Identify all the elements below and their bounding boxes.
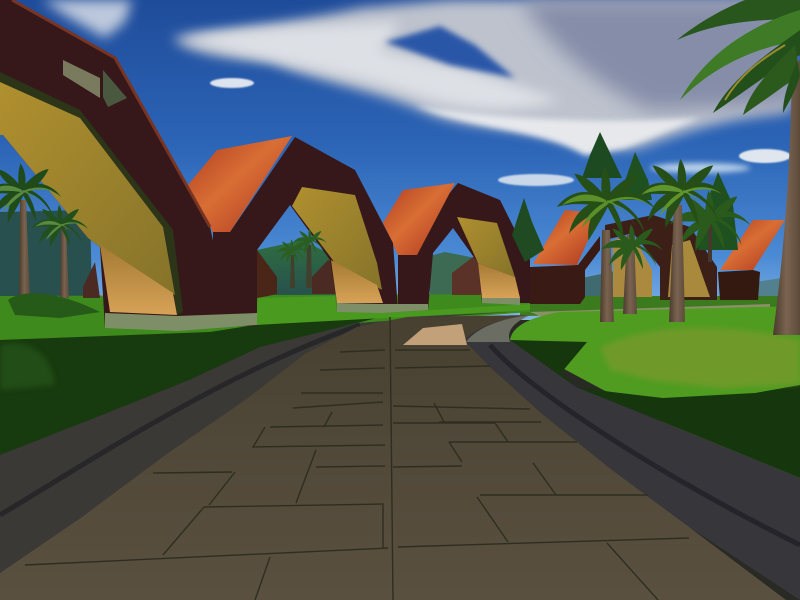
small far arches xyxy=(83,250,482,298)
left grass, shaded xyxy=(0,316,385,455)
left grass, sunlit xyxy=(0,294,530,345)
palm trunks xyxy=(600,205,685,322)
arch 1 panel xyxy=(103,70,127,107)
palm crowns xyxy=(557,159,728,270)
blue gap in cloud xyxy=(385,26,515,78)
arch 4b behind palms xyxy=(605,215,717,300)
arch 3 underside lower xyxy=(478,263,520,298)
sky xyxy=(0,0,800,320)
palm trees xyxy=(0,0,800,335)
arch 4 roof xyxy=(533,210,600,265)
clouds xyxy=(42,0,791,186)
main cloud body xyxy=(172,0,790,152)
arch 5 xyxy=(718,220,785,300)
conifer a xyxy=(582,132,622,178)
mid horizon cloud xyxy=(498,174,574,186)
right grass, sunlit xyxy=(510,306,800,480)
paving joints xyxy=(25,317,689,600)
arch 2 roof xyxy=(188,136,292,232)
conifer c xyxy=(698,172,738,250)
arch 3 roof xyxy=(383,183,455,255)
arch 2 base xyxy=(337,303,428,313)
conifer b xyxy=(618,152,652,200)
arch 1 vents xyxy=(63,60,100,98)
arch 1 xyxy=(0,0,257,331)
road curbs xyxy=(0,312,800,600)
light lower cloud streak xyxy=(415,105,700,155)
arch 4b underside left xyxy=(613,235,652,297)
right horizon cloud xyxy=(739,149,791,163)
distant hills xyxy=(0,210,782,306)
left curb groove xyxy=(0,325,360,515)
right curb xyxy=(464,315,800,600)
arch 3 base xyxy=(482,298,520,305)
pale far path strip xyxy=(530,304,770,316)
far grass band behind the road bend xyxy=(520,296,800,316)
small left cloud xyxy=(210,78,254,88)
road xyxy=(0,315,786,600)
palm d crown xyxy=(670,191,750,262)
far palms xyxy=(276,229,327,288)
upper left cloud xyxy=(42,0,132,38)
large right palm xyxy=(677,0,800,335)
arch 3 underside upper xyxy=(457,217,515,277)
left palm a xyxy=(0,163,61,298)
arch 2 underside lower xyxy=(331,260,383,303)
arch 1 underside lower xyxy=(100,245,177,315)
right curb groove xyxy=(490,345,800,545)
sunlit road patch xyxy=(403,324,467,345)
wildflower patch xyxy=(600,328,800,388)
left palm b xyxy=(32,205,88,298)
left curb xyxy=(0,312,510,573)
left foreground bushes xyxy=(0,293,100,390)
horizon streaks xyxy=(650,163,750,173)
arch 3 xyxy=(383,183,530,310)
sunlit right curb xyxy=(466,315,530,342)
bright left cloud mass xyxy=(180,22,560,109)
arch 1 base xyxy=(105,313,257,331)
arch 2 underside upper xyxy=(292,187,382,290)
lit strip beyond arches xyxy=(255,296,530,325)
large palm trunk xyxy=(773,60,800,335)
arch 4b underside right xyxy=(668,240,710,297)
arch 5 roof xyxy=(720,220,785,270)
arch 1 underside upper xyxy=(0,82,175,295)
arch 4 xyxy=(530,210,600,304)
arch 1 green strip xyxy=(0,72,183,315)
right grass, shadow xyxy=(510,340,800,478)
grey upper right cloud xyxy=(520,0,790,110)
conifer centre xyxy=(512,198,544,262)
arch 2 xyxy=(188,136,428,317)
arch 1 roof rim xyxy=(12,0,210,227)
